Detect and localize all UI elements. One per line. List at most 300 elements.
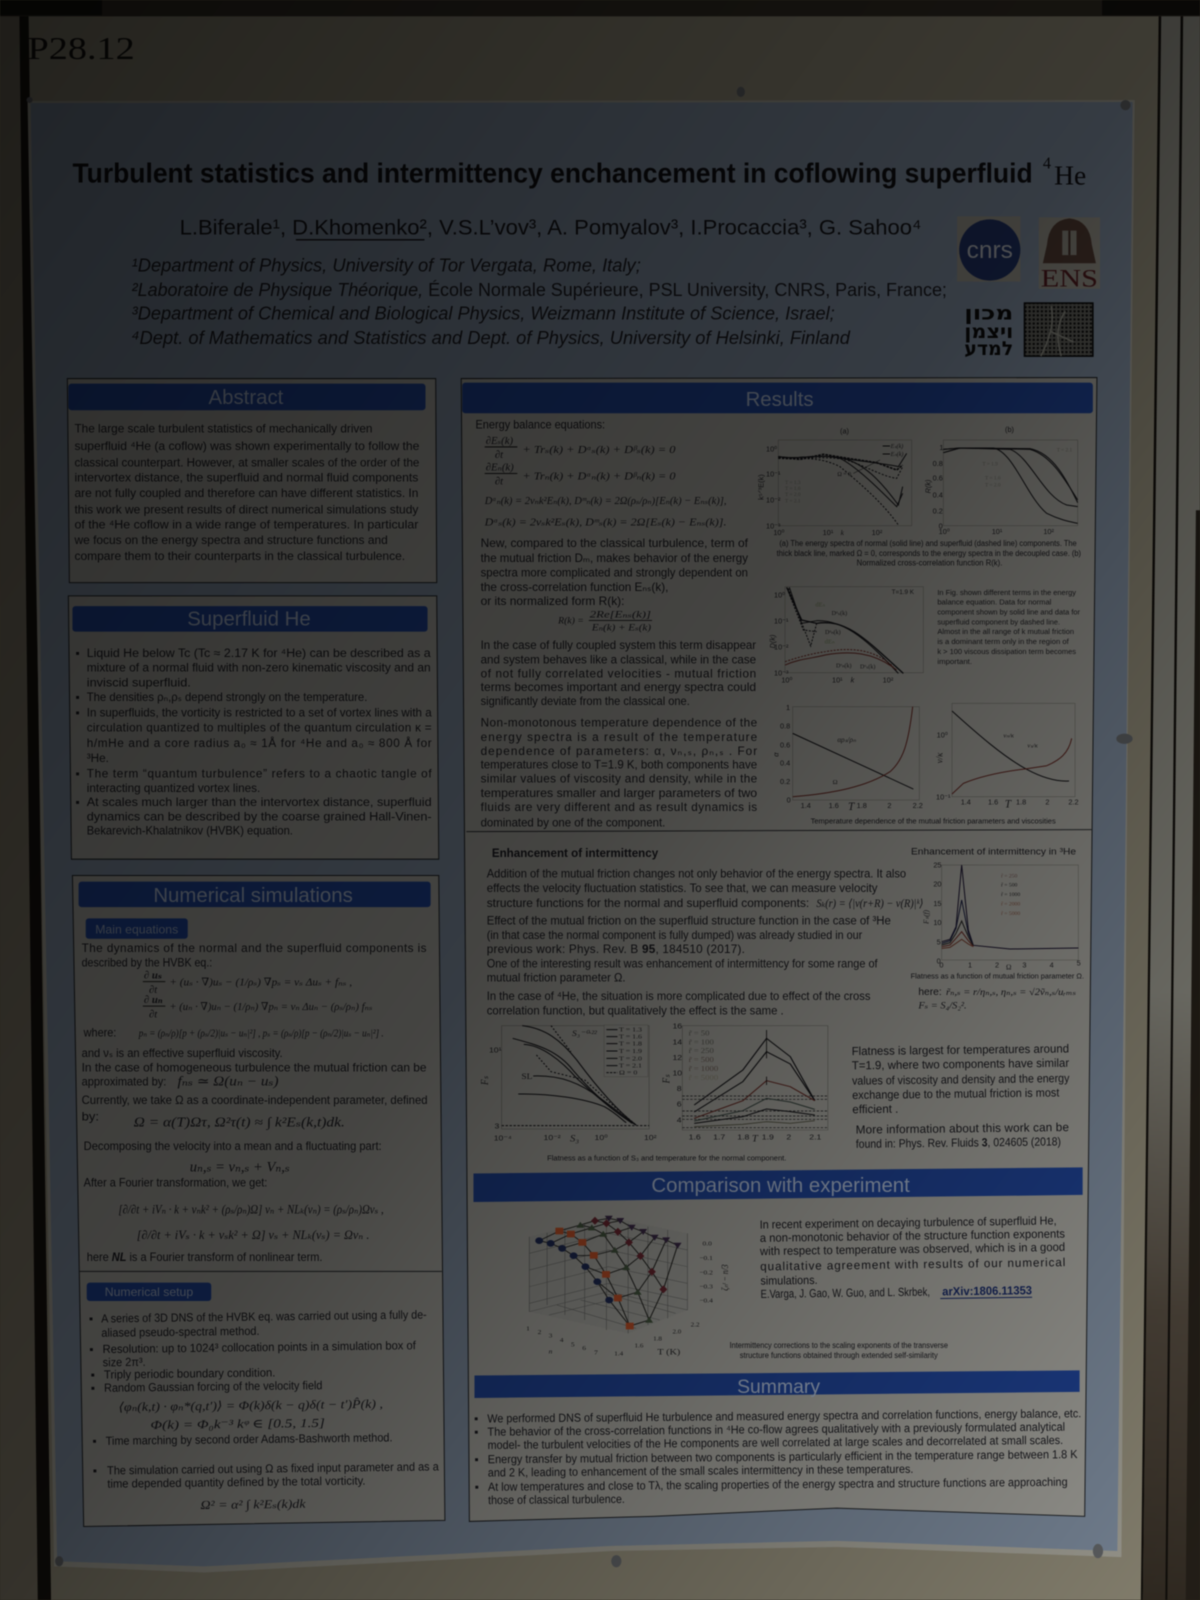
abstract text: superfluid ⁴He (a coflow) was shown experimentally to follow the — [74, 440, 419, 453]
chart: mutual friction parameters: 1.8 — [857, 801, 867, 810]
chart: viscosities: 10⁰ — [937, 730, 948, 739]
numerical setup bullets — [89, 1308, 440, 1514]
chart: flatness vs temperature: 2 — [786, 1133, 792, 1141]
chart: mutual friction parameters: T — [848, 801, 855, 813]
chart: flatness vs mutual friction: 5 — [1077, 959, 1081, 968]
chart: flatness vs mutual friction: 3 — [1022, 960, 1026, 969]
chart: flatness vs temperature: 1.6 — [689, 1133, 701, 1141]
text: energy balance explanation: important. — [937, 657, 972, 666]
summary bullets: model- the turbulent velocities of the He components are well correlated at large scales and decorrelated at small scales. — [488, 1434, 1063, 1452]
main equations text and formulas: The dynamics of the normal and the superfluid components is — [82, 942, 427, 955]
caption: intermittency corrections: Intermittency corrections to the scaling exponents of the transverse — [730, 1341, 948, 1350]
logo: CNRS — [957, 216, 1020, 282]
chart: 3D intermittency corrections: T (K) — [657, 1347, 680, 1357]
abstract text — [73, 423, 419, 563]
chart: mutual friction parameters: 1.4 — [801, 801, 811, 810]
chart: 3D intermittency corrections: 4 — [560, 1337, 564, 1344]
chart: flatness vs S3: 10⁻² — [544, 1134, 561, 1142]
chart a: energy spectra: T = 1.3 — [785, 480, 801, 486]
chart: flatness vs temperature: 1.9 — [762, 1133, 774, 1141]
chart a: energy spectra — [756, 426, 912, 537]
chart: flatness vs temperature: 8 — [677, 1085, 682, 1093]
energy balance equations: ∂t — [495, 449, 504, 461]
chart: energy balance terms: 10⁻¹ — [774, 616, 789, 625]
chart: energy balance terms: dEₙ — [825, 638, 835, 645]
chart b: cross-correlation: 0 — [939, 521, 943, 530]
chart: viscosities: 1.4 — [961, 798, 971, 807]
results text: mutual friction: the mutual friction Dₘ, makes behavior of the energy — [481, 552, 748, 565]
chart a: energy spectra: 10⁰ — [766, 445, 777, 454]
main equations text and formulas: ∂ uₛ — [144, 970, 162, 982]
chart a: energy spectra: T = 2.0 — [785, 492, 801, 498]
chart: viscosities — [934, 703, 1079, 810]
text: flatness note: found in: Phys. Rev. Fluids 3, 024605 (2018) — [856, 1135, 1061, 1151]
numerical setup bullets: Resolution: up to 1024³ collocation points in a simulation box of — [103, 1339, 417, 1356]
chart: flatness vs temperature: 1.7 — [713, 1133, 726, 1141]
chart: energy balance terms: Dᵛₛ(k) — [860, 663, 875, 670]
superfluid He bullets — [76, 647, 432, 838]
chart: mutual friction parameters: 2 — [887, 801, 891, 810]
affiliations: ³Department of Chemical and Biological Physics, Weizmann Institute of Science, Israel; — [132, 302, 835, 323]
chart b: cross-correlation: (b) — [1005, 425, 1014, 434]
chart: flatness vs temperature: 4 — [677, 1116, 682, 1124]
chart a: energy spectra: 10² — [872, 528, 883, 537]
chart: 3D intermittency corrections: 1.6 — [634, 1343, 644, 1350]
summary bullets: ▪ — [474, 1413, 478, 1426]
chart: flatness vs S3: 10¹ — [489, 1046, 502, 1054]
main equations text and formulas: Decomposing the velocity into a mean and a fluctuating part: — [84, 1140, 382, 1153]
logo: ENS — [1039, 217, 1100, 293]
energy balance equations: ∂Eₙ(k) — [486, 461, 514, 473]
chart: 3D intermittency corrections: 2.0 — [672, 1329, 682, 1335]
caption: spectra figure — [777, 539, 1081, 567]
superfluid He bullets: circulation quantized to multiples of the quantum circulation κ = — [87, 722, 432, 735]
summary bullets: Energy transfer by mutual friction between two components is particularly efficient in the temperature range between 1.8 K — [488, 1448, 1078, 1466]
chart: flatness vs mutual friction: r̃ = 1000 — [1001, 891, 1020, 898]
chart b: cross-correlation: 10⁰ — [939, 527, 950, 536]
sub-heading: numerical setup — [87, 1283, 211, 1301]
chart: 3D intermittency corrections: 6 — [582, 1345, 587, 1352]
chart: 3D intermittency corrections: 0.0 — [703, 1240, 712, 1247]
caption: spectra figure: Normalized cross-correlation function R(k). — [857, 558, 1002, 567]
chart a: energy spectra: 10⁰ — [773, 528, 784, 537]
title: 4 — [1043, 153, 1051, 172]
chart: energy balance terms: Dᵅₛ(k) — [832, 610, 847, 617]
text: energy balance explanation: Almost in the all range of k mutual friction — [937, 627, 1074, 636]
results text: mutual friction: New, compared to the classical turbulence, term of — [481, 537, 749, 550]
chart: flatness vs temperature: r̃ = 250 — [689, 1047, 714, 1055]
chart: flatness vs temperature: 14 — [672, 1038, 683, 1046]
chart: energy balance terms — [768, 587, 923, 685]
chart: 3D intermittency corrections: 2 — [538, 1329, 542, 1336]
results text: mutual friction: fluids are very different and as result dynamics is — [481, 801, 757, 814]
chart: flatness vs temperature: 12 — [672, 1054, 683, 1062]
comparison with experiment heading: Comparison with experiment — [651, 1175, 910, 1197]
main equations text and formulas: fₙₛ ≃ Ω(uₙ − uₛ) — [178, 1074, 279, 1089]
chart: flatness vs temperature: r̃ = 500 — [689, 1056, 714, 1064]
title: Turbulent statistics and intermittency enchancement in coflowing superfluid — [72, 158, 1033, 189]
sub-heading: main equations: Main equations — [95, 923, 178, 937]
enhancement of intermittency text: mutual friction parameter Ω. — [487, 972, 626, 985]
summary heading: Summary — [737, 1376, 820, 1398]
main equations text and formulas: by: — [82, 1110, 99, 1123]
chart: viscosities: 10⁻¹ — [936, 792, 951, 801]
text: comparison with experiment: simulations. — [760, 1274, 818, 1288]
main equations text and formulas: ∂ uₙ — [144, 994, 163, 1006]
text: flatness note: More information about this work can be — [856, 1121, 1069, 1137]
numerical setup bullets: size 2π³. — [103, 1356, 146, 1369]
superfluid He bullets: The densities ρₙ,ρₛ depend strongly on the temperature. — [87, 691, 367, 704]
chart: mutual friction parameters: 1 — [786, 703, 790, 712]
summary bullets: ▪ — [474, 1453, 479, 1466]
numerical setup bullets: Φ(k) = Φ₀k⁻³ kᵠ ∈ [0.5, 1.5] — [150, 1416, 325, 1432]
results text: mutual friction: significantly deviate from the classical one. — [481, 695, 690, 708]
superfluid He bullets: The term “quantum turbulence” refers to a chaotic tangle of — [87, 768, 432, 781]
chart: flatness vs mutual friction: Ω — [1006, 962, 1012, 971]
panel: superfluid He — [68, 596, 439, 859]
caption: flatness: Flatness as a function of S₃ and temperature for the normal component. — [547, 1154, 786, 1163]
chart: flatness vs S3: T = 2.0 — [619, 1054, 642, 1062]
numerical setup bullets: Random Gaussian forcing of the velocity field — [104, 1379, 323, 1395]
main equations text and formulas: pₙ = (ρₙ/ρ)[p + (ρₛ/2)|uₛ − uₙ|²] , pₛ = (ρₛ/ρ)[p − (ρₙ/2)|uₛ − uₙ|²] . — [138, 1028, 384, 1040]
chart: flatness vs S3: S₃⁻⁰·²² — [572, 1029, 597, 1038]
results heading — [462, 383, 1093, 413]
enhancement of intermittency text: In the case of ⁴He, the situation is more complicated due to effect of the cross — [487, 990, 871, 1003]
chart: flatness vs S3: T = 1.6 — [619, 1032, 642, 1040]
chart b: cross-correlation — [924, 425, 1078, 536]
charts column: spectra, balance, parameters — [756, 425, 1081, 826]
energy balance equations: Energy balance equations: — [476, 419, 605, 432]
chart a: energy spectra: 10⁻¹ — [766, 470, 781, 479]
superfluid He bullets: interacting quantized vortex lines. — [87, 782, 260, 795]
results text: mutual friction — [481, 537, 758, 830]
numerical setup bullets: ▪ — [91, 1382, 95, 1395]
main equations text and formulas: + (uₙ · ∇)uₙ − (1/ρₙ) ∇pₙ = νₙ Δuₙ − (ρₛ/ρₙ) fₙₛ — [169, 1001, 373, 1013]
enhancement of intermittency text: effects the velocity fluctuation statistics. To see that, we can measure velocity — [487, 882, 878, 895]
superfluid He heading: Superfluid He — [187, 609, 311, 631]
text: flatness note: values of viscosity and density and the energy — [852, 1072, 1070, 1088]
results text: mutual friction: energy spectra is a result of the temperature — [481, 731, 757, 744]
chart: flatness vs mutual friction: 1 — [968, 960, 972, 969]
results text: mutual friction: Eₙ(k) + Eₛ(k) — [591, 623, 651, 633]
chart: energy balance terms: Dᵛₙ(k) — [836, 662, 851, 669]
superfluid He bullets: mixture of a normal fluid with non-zero kinematic viscosity and an — [87, 661, 431, 674]
chart: mutual friction parameters — [771, 703, 923, 813]
results heading: Results — [746, 389, 814, 411]
chart: mutual friction parameters: αρₛ/ρₙ — [837, 735, 856, 744]
enhancement of intermittency text: Sₖ(r) = ⟨|v(r+R) − v(R)|ᵏ⟩ — [816, 898, 923, 910]
chart: mutual friction parameters: 0.6 — [780, 740, 790, 749]
superfluid He bullets: Liquid He below Tc (Tc ≈ 2.17 K for ⁴He) can be described as a — [87, 647, 431, 660]
chart: 3D intermittency corrections: 1 — [526, 1325, 530, 1332]
abstract text: The large scale turbulent statistics of mechanically driven — [74, 423, 372, 436]
text: flatness note: efficient . — [852, 1103, 898, 1116]
caption: parameters: Temperature dependence of the mutual friction parameters and viscosities — [811, 819, 1056, 826]
energy balance equations: ∂t — [495, 476, 504, 488]
chart: flatness vs temperature: 2.1 — [809, 1133, 822, 1141]
text: flatness note: Flatness is largest for temperatures around — [852, 1042, 1069, 1058]
abstract heading: Abstract — [209, 387, 284, 409]
numerical setup bullets: Time marching by second order Adams-Bashworth method. — [106, 1431, 393, 1448]
chart a: energy spectra: k — [841, 528, 845, 537]
chart: flatness vs temperature: r̃ = 1000 — [689, 1065, 718, 1073]
energy balance equations: Dᵅₛ(k) = 2νₛk²Eₛ(k), Dᵐₛ(k) = 2Ω[Eₛ(k) − Eₙₛ(k)]. — [484, 517, 727, 529]
enhancement of intermittency text: (in that case the normal component is fully dumped) was already studied in our — [487, 929, 862, 942]
energy balance equations: + Trₙ(k) + Dᵅₙ(k) + Dᵝₙ(k) = 0 — [522, 471, 676, 483]
chart: flatness vs mutual friction: 0 — [939, 961, 943, 970]
text: energy balance explanation: In Fig. shown different terms in the energy — [937, 588, 1076, 597]
numerical setup bullets: Triply periodic boundary condition. — [104, 1366, 275, 1382]
results text: mutual friction: 2Re[Eₙₛ(k)] — [590, 609, 652, 619]
text: comparison with experiment: qualitative agreement with results of our numerical — [760, 1256, 1065, 1273]
sub-heading: main equations — [86, 918, 188, 939]
chart: 3D intermittency corrections: 2.2 — [691, 1322, 700, 1328]
chart: flatness vs S3: SL — [521, 1072, 532, 1081]
results text: mutual friction: and system behaves like a classical, while in the case — [481, 653, 756, 666]
text: energy balance explanation: component shown by solid line and data for — [937, 608, 1081, 617]
enhancement of intermittency text: Enhancement of intermittency — [492, 846, 658, 860]
chart: flatness vs mutual friction: r̃ = 500 — [1001, 882, 1018, 889]
chart: 3D intermittency corrections: 7 — [594, 1349, 598, 1356]
summary heading — [474, 1370, 1080, 1398]
chart: flatness vs mutual friction: 20 — [933, 880, 941, 889]
text: flatness note: exchange due to the mutual friction is most — [852, 1086, 1060, 1102]
results text: mutual friction: spectra more complicated and strongly dependent on — [481, 567, 748, 580]
numerical setup bullets: ▪ — [93, 1465, 97, 1478]
chart: energy balance terms: D(k) — [768, 635, 777, 648]
results text: mutual friction: temperatures close to T=1.9 K, both components have — [481, 758, 757, 771]
main equations text and formulas: ∂t — [149, 1008, 158, 1020]
text: flatness note — [852, 1042, 1070, 1151]
affiliations: ⁴Dept. of Mathematics and Statistics and Dept. of Physics, University of Helsinki, Finland — [132, 327, 851, 348]
results text: mutual friction: dominated by one of the component. — [481, 817, 665, 830]
affiliations: ¹Department of Physics, University of Tor Vergata, Rome, Italy; — [132, 254, 641, 275]
main equations text and formulas: [∂/∂t + iVₙ · k + νₙk² + (ρₛ/ρₙ)Ω] vₙ + NLₖ(vₙ) = (ρₛ/ρₙ)Ωvₛ , — [118, 1202, 384, 1216]
chart: flatness vs mutual friction: 25 — [933, 861, 941, 870]
enhancement of intermittency text: correlation function, but qualitatively the effect is the same . — [487, 1004, 784, 1017]
main equations text and formulas — [82, 942, 428, 1264]
main equations text and formulas: where: — [83, 1027, 116, 1040]
chart: flatness vs mutual friction: Flatness as a function of mutual friction parameter Ω. — [911, 974, 1084, 981]
chart b: cross-correlation: 0.2 — [933, 506, 943, 515]
chart: flatness vs S3: 3 — [495, 1122, 500, 1130]
numerical setup bullets: ▪ — [91, 1369, 95, 1382]
chart b: cross-correlation: 0.8 — [933, 459, 943, 468]
numerical setup bullets: aliased pseudo-spectral method. — [101, 1325, 260, 1340]
chart: energy balance terms: Dᵅₙ(k) — [825, 629, 841, 636]
chart: energy balance terms: 10⁰ — [781, 676, 792, 685]
poster code P28.12: P28.12 — [28, 31, 135, 66]
numerical setup bullets: ▪ — [92, 1435, 97, 1448]
main equations text and formulas: here NL is a Fourier transform of nonlinear term. — [87, 1251, 322, 1264]
results text: mutual friction: or its normalized form R(k): — [481, 595, 624, 608]
chart: mutual friction parameters: 0.4 — [780, 759, 790, 768]
chart a: energy spectra: k⁵ᐟ³E(k) — [756, 474, 765, 500]
affiliations: ²Laboratoire de Physique Théorique, École Normale Supérieure, PSL University, CNRS, Paris, France; — [132, 279, 947, 300]
panel: abstract — [67, 379, 437, 583]
panel: numerical simulations — [72, 876, 445, 1527]
chart: viscosities: νₙ/κ — [1003, 732, 1015, 739]
chart: energy balance terms: 10⁰ — [774, 590, 785, 599]
chart: flatness vs S3: T = 2.1 — [619, 1061, 642, 1069]
chart: 3D intermittency corrections: 5 — [571, 1341, 575, 1348]
chart: 3D intermittency corrections: 1.8 — [653, 1336, 663, 1342]
abstract text: of the ⁴He coflow in a wide range of temperatures. In particular — [74, 519, 418, 532]
chart: mutual friction parameters: Ω — [833, 779, 838, 786]
chart: flatness vs S3: T = 1.3 — [619, 1025, 642, 1033]
chart b: cross-correlation: 0.6 — [933, 474, 943, 483]
numerical simulations heading — [79, 882, 431, 907]
text: energy balance explanation: balance equation. Data for normal — [937, 598, 1052, 607]
chart a: energy spectra: T = 2.1 — [785, 499, 801, 505]
chart: flatness vs mutual friction: r̃ = 250 — [1001, 873, 1018, 880]
results text: mutual friction: the cross-correlation function Eₙₛ(k), — [481, 581, 668, 594]
superfluid He bullets: Bekarevich-Khalatnikov (HVBK) equation. — [87, 825, 293, 838]
chart b: cross-correlation: R(k) — [924, 479, 933, 493]
text: comparison with experiment: with respect to temperature was observed, which is in a good — [759, 1241, 1065, 1258]
main equations text and formulas: In the case of homogeneous turbulence the mutual friction can be — [82, 1061, 427, 1074]
chart: flatness vs mutual friction: here: — [918, 987, 942, 998]
main equations text and formulas: Ω = α(T)Ωτ, Ω²τ(t) ≈ ∫ k²Eₛ(k,t)dk. — [134, 1115, 345, 1131]
superfluid He bullets: At scales much larger than the intervortex distance, superfluid — [87, 796, 432, 809]
chart: flatness vs S3: T = 1.9 — [619, 1047, 642, 1055]
caption: intermittency corrections — [730, 1341, 948, 1360]
summary bullets: ▪ — [475, 1481, 479, 1494]
chart a: energy spectra: Ω = 0 — [837, 472, 851, 478]
chart: energy balance terms: dEₛ — [815, 602, 826, 609]
chart b: cross-correlation: 1 — [939, 443, 943, 452]
chart: 3D intermittency corrections: n — [549, 1348, 553, 1356]
results text: mutual friction: terms becomes important and energy spectra could — [481, 681, 756, 694]
chart: energy balance terms: k — [851, 676, 855, 685]
chart: flatness vs temperature: T — [752, 1134, 759, 1144]
logo: CNRS: cnrs — [967, 237, 1013, 264]
text: comparison with experiment: In recent experiment on decaying turbulence of superfluid He, — [760, 1214, 1057, 1232]
summary bullets: At low temperatures and close to Tλ, the scaling properties of the energy spectra and structure functions are approaching — [488, 1476, 1068, 1494]
numerical setup bullets: Ω² = α² ∫ k²Eₛ(k)dk — [200, 1497, 306, 1513]
main equations text and formulas: + (uₛ · ∇)uₛ − (1/ρₛ) ∇pₛ = νₛ Δuₛ + fₙₛ , — [169, 977, 352, 989]
main equations text and formulas: described by the HVBK eq.: — [82, 956, 212, 969]
summary bullets: and 2 K, leading to enhancement of the small scales intermittency in these temperatures. — [488, 1463, 913, 1480]
summary bullets: those of classical turbulence. — [488, 1493, 625, 1507]
chart: flatness vs mutual friction: Enhancement of intermittency in ³He — [911, 846, 1076, 856]
chart: flatness vs temperature: Fₛ — [661, 1074, 673, 1084]
numerical setup bullets: ▪ — [89, 1313, 93, 1326]
results text: mutual friction: dependence of parameters: α, νₙ,ₛ, ρₙ,ₛ . For — [481, 745, 757, 758]
superfluid He bullets: ▪ — [76, 768, 80, 781]
chart: flatness vs mutual friction: r̃ₙ,ₛ = r/ηₙ,ₛ, ηₙ,ₛ = √2ṽₙ,ₛ/uᵣₘₛ — [946, 987, 1076, 998]
summary bullets: We performed DNS of superfluid He turbulence and measured energy spectra and correlation functions, energy balance, etc. — [487, 1407, 1081, 1425]
enhancement of intermittency text — [487, 846, 923, 1017]
logo: Weizmann Institute: מכון — [964, 301, 1013, 324]
comparison with experiment heading — [473, 1167, 1083, 1202]
superfluid He bullets: ▪ — [76, 796, 80, 809]
chart: viscosities: T — [1005, 798, 1012, 810]
chart b: cross-correlation: T = 2.1 — [1057, 448, 1073, 454]
chart: flatness vs S3: T = 1.8 — [619, 1039, 642, 1047]
enhancement of intermittency text: Effect of the mutual friction on the superfluid structure function in the case of ³He — [487, 914, 891, 927]
chart: flatness vs S3: S₃ — [570, 1134, 580, 1144]
abstract text: intervortex distance, the superfluid and normal fluid components — [74, 472, 419, 485]
chart a: energy spectra: T = 1.6 — [785, 486, 801, 492]
enhancement of intermittency text: structure functions for the normal and superfluid components: — [487, 897, 809, 910]
chart: flatness vs temperature: r̃ = 5000 — [689, 1074, 718, 1082]
chart: mutual friction parameters: 0.2 — [780, 777, 790, 786]
chart: flatness vs mutual friction: 4 — [1050, 960, 1054, 969]
text: energy balance explanation — [937, 588, 1081, 666]
chart: viscosities: 1.6 — [988, 798, 998, 807]
chart: flatness vs temperature: 16 — [672, 1022, 683, 1030]
chart: 3D intermittency corrections: −0.2 — [699, 1269, 714, 1276]
caption: spectra figure: thick black line, marked Ω = 0, corresponds to the energy spectra in the decoupled case. (b) — [777, 549, 1081, 558]
chart: mutual friction parameters: α — [771, 752, 780, 757]
chart b: cross-correlation: T = 1.6 — [985, 475, 1001, 481]
chart a: energy spectra: 10⁻² — [766, 496, 781, 505]
abstract text: we focus on the energy spectra and structure functions and — [73, 534, 388, 547]
summary bullets: ▪ — [474, 1426, 478, 1439]
caption: spectra figure: (a) The energy spectra of normal (solid line) and superfluid (dashed line) components. The — [779, 539, 1077, 548]
numerical simulations heading: Numerical simulations — [153, 885, 353, 907]
chart: flatness vs S3 — [479, 1025, 657, 1144]
chart: energy balance terms: 10⁻³ — [774, 668, 789, 677]
results text: mutual friction: Non-monotonous temperature dependence of the — [481, 717, 757, 730]
chart: flatness vs S3: 10⁰ — [595, 1134, 608, 1142]
abstract text: are not fully coupled and therefore can have different statistics. In — [74, 487, 418, 500]
text: energy balance explanation: superfluid component by dashed line. — [937, 617, 1060, 626]
enhancement of intermittency text: Addition of the mutual friction changes not only behavior of the energy spectra. It also — [487, 868, 907, 881]
main equations text and formulas: After a Fourier transformation, we get: — [84, 1177, 267, 1190]
superfluid He bullets: inviscid superfluid. — [87, 677, 191, 690]
text: energy balance explanation: is a dominant term only in the region of — [937, 637, 1070, 646]
chart a: energy spectra: Eₙ(k) — [890, 451, 903, 458]
superfluid He bullets: ▪ — [76, 647, 80, 660]
chart: flatness vs temperature: r̃ = 50 — [689, 1029, 709, 1037]
chart: 3D intermittency corrections: −0.1 — [699, 1255, 714, 1262]
text: comparison with experiment: arXiv:1806.11353 — [942, 1284, 1033, 1298]
superfluid He bullets: h/mHe and a core radius a₀ ≈ 1Å for ⁴He and a₀ ≈ 800 Å for — [87, 737, 432, 750]
chart: flatness vs mutual friction: Fₛ = S₄/S₂². — [917, 1002, 967, 1012]
main equations text and formulas: approximated by: — [82, 1076, 166, 1089]
chart: mutual friction parameters: 0 — [787, 796, 791, 805]
numerical setup bullets: A series of 3D DNS of the HVBK eq. was carried out using a fully de- — [101, 1308, 427, 1325]
numerical setup bullets: ▪ — [89, 1343, 94, 1356]
chart: flatness vs temperature: r̃ = 100 — [689, 1038, 714, 1046]
affiliations — [132, 254, 947, 348]
chart: 3D intermittency corrections — [526, 1216, 730, 1357]
energy balance equations — [476, 419, 727, 529]
sub-heading: numerical setup: Numerical setup — [105, 1285, 193, 1299]
main equations text and formulas: and νₛ is an effective superfluid viscosity. — [82, 1047, 283, 1060]
chart a: energy spectra: (a) — [840, 426, 849, 435]
chart: flatness vs temperature — [661, 1022, 828, 1144]
chart: flatness vs mutual friction — [911, 846, 1084, 1012]
chart: viscosities: 2.2 — [1068, 798, 1079, 807]
chart: flatness vs S3: Fₛ — [479, 1076, 491, 1086]
chart: flatness vs mutual friction: Fₛ(f) — [921, 909, 930, 925]
logo: Weizmann Institute — [964, 301, 1093, 360]
chart: 3D intermittency corrections: 3 — [549, 1332, 553, 1340]
chart: viscosities: 2 — [1045, 798, 1049, 807]
results text: mutual friction: temperatures smaller and larger parameters of two — [481, 787, 758, 800]
chart: 3D intermittency corrections: −0.3 — [699, 1283, 714, 1291]
chart: flatness vs S3: Ω = 0 — [619, 1068, 638, 1076]
text: comparison with experiment: a non-monotonic behavior of the structure function exponents — [760, 1228, 1065, 1245]
chart a: energy spectra: 10¹ — [823, 528, 834, 537]
energy balance equations: Dᵅₙ(k) = 2νₙk²Eₙ(k), Dᵐₙ(k) = 2Ω(ρₛ/ρₙ)[Eₙ(k) − Eₙₛ(k)], — [484, 495, 727, 507]
abstract heading — [68, 384, 426, 410]
results text: mutual friction: R(k) = — [557, 615, 584, 626]
chart: flatness vs mutual friction: 2 — [995, 960, 999, 969]
